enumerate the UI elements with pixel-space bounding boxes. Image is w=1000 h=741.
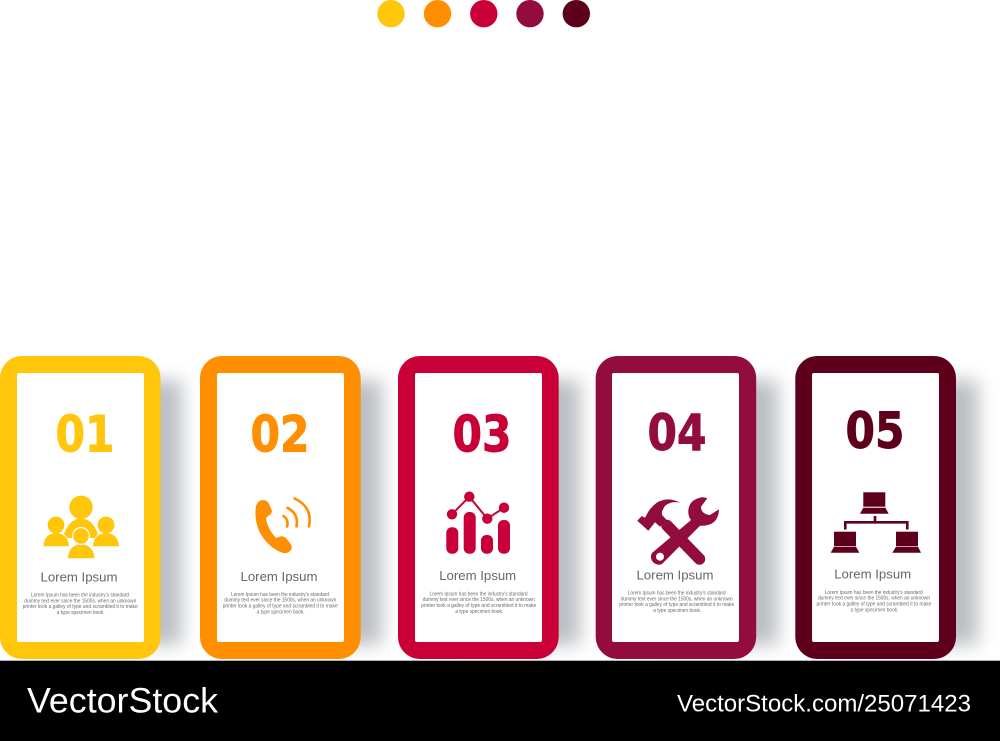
icon: phone with signal waves <box>255 498 310 553</box>
text block 04: Lorem Ipsum has been the industry's standard <box>628 590 726 596</box>
text block 03: printer took a galley of type and scrambled it to make <box>421 603 536 609</box>
icon: bar and line chart <box>446 492 510 554</box>
text block 04: dummy text ever since the 1500s, when an unknown <box>621 596 733 602</box>
text block 02: Lorem Ipsum has been the industry's standard <box>231 592 329 598</box>
panel: card 02 <box>200 356 382 659</box>
heading 02: Lorem Ipsum <box>241 569 317 584</box>
text block 03: dummy text ever since the 1500s, when an unknown <box>423 597 535 603</box>
text block 05: a type specimen book. <box>850 607 898 613</box>
text block 02: printer took a galley of type and scrambled it to make <box>223 603 338 609</box>
panel: card 04 <box>596 356 778 659</box>
panel: card 01 <box>0 356 182 659</box>
text block 01: printer took a galley of type and scrambled it to make <box>23 604 138 610</box>
text block 04: printer took a galley of type and scrambled it to make <box>619 602 734 608</box>
text block 05: printer took a galley of type and scrambled it to make <box>816 601 932 607</box>
text block 04 <box>619 590 734 614</box>
icon: hammer and wrench <box>637 497 719 565</box>
text block 04: a type specimen book. <box>653 608 701 614</box>
text block 01: dummy text ever since the 1500s, when an unknown <box>24 598 136 604</box>
heading 05: Lorem Ipsum <box>834 567 911 582</box>
panel: card 05 <box>795 356 978 659</box>
text block 01 <box>23 592 138 616</box>
panel: card 03 <box>398 356 580 659</box>
heading 04: Lorem Ipsum <box>637 567 713 582</box>
heading 01: Lorem Ipsum <box>41 570 117 585</box>
text block 01: a type specimen book. <box>57 610 105 616</box>
text block 02: a type specimen book. <box>257 609 305 615</box>
number 04: 04 <box>648 404 706 462</box>
footer logo: VectorStock <box>27 682 219 720</box>
footer bar <box>0 661 1000 741</box>
icon: laptop network <box>831 492 921 553</box>
number 03: 03 <box>452 406 512 464</box>
footer image id: VectorStock.com/25071423 <box>677 691 971 718</box>
text block 05: dummy text ever since the 1500s, when an unknown <box>818 596 930 602</box>
number 01: 01 <box>56 406 114 464</box>
text block 03: a type specimen book. <box>455 609 503 615</box>
palette dots <box>377 0 590 27</box>
text block 05: Lorem Ipsum has been the industry's standard <box>825 590 923 596</box>
text block 03: Lorem Ipsum has been the industry's standard <box>430 591 528 597</box>
heading 03: Lorem Ipsum <box>439 568 516 583</box>
number 02: 02 <box>250 406 310 464</box>
text block 03 <box>421 591 536 615</box>
text block 05 <box>816 590 932 613</box>
icon: group of people <box>43 496 120 558</box>
text block 02 <box>223 592 338 615</box>
text block 02: dummy text ever since the 1500s, when an unknown <box>224 598 336 604</box>
number 05: 05 <box>846 402 904 460</box>
text block 01: Lorem Ipsum has been the industry's standard <box>31 592 129 598</box>
